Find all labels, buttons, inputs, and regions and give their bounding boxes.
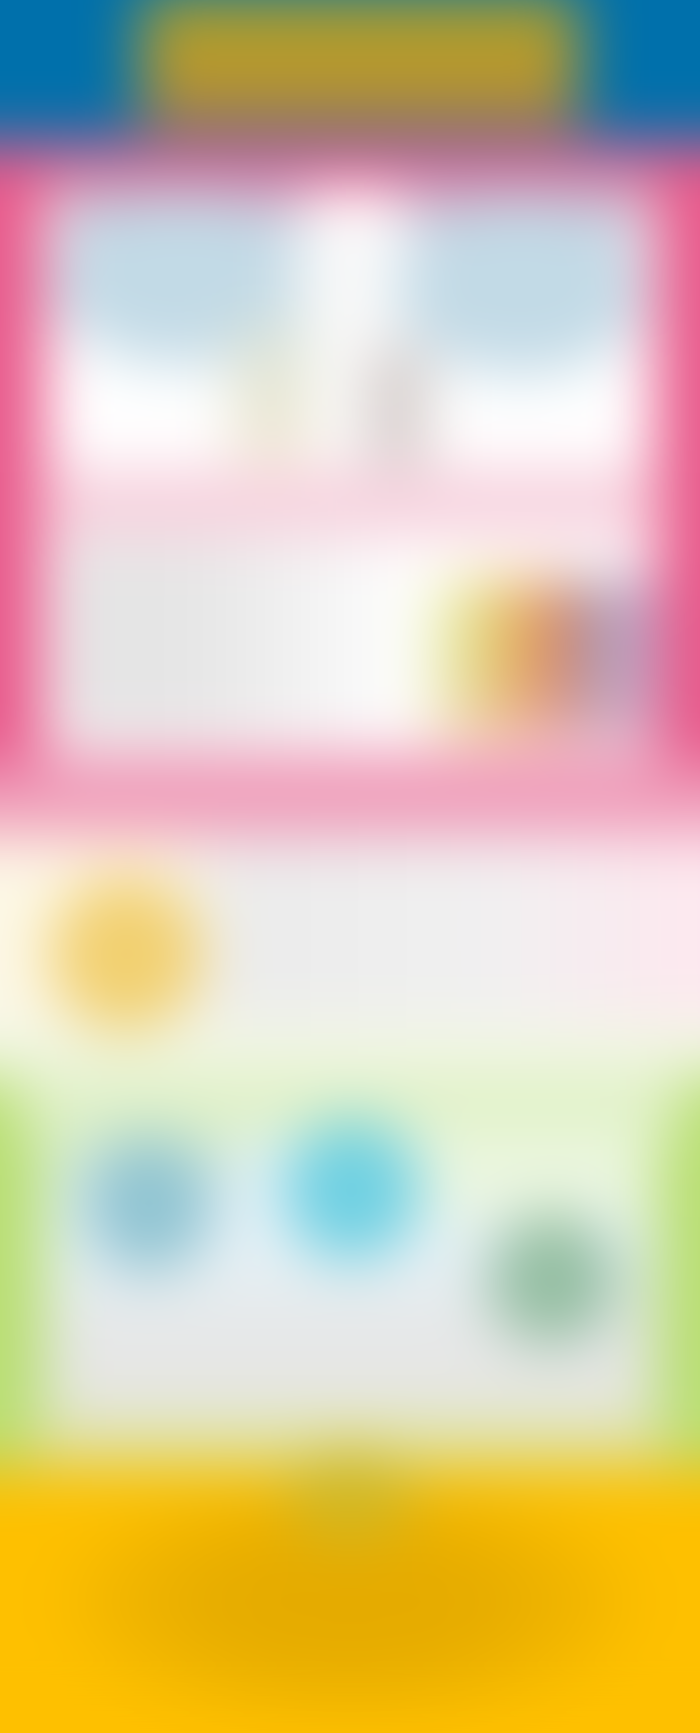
stripe: orange	[512, 580, 562, 740]
panel: upper white card	[44, 185, 656, 485]
band: pink footer of section	[0, 765, 700, 835]
icon: yellow sun circle	[50, 876, 202, 1032]
stripe: lavender	[598, 580, 653, 740]
icon: sage circle	[488, 1214, 616, 1344]
panel: lower white card	[44, 535, 656, 757]
lavender heading strip, upper card	[56, 180, 306, 224]
icon: blue circle	[84, 1136, 214, 1272]
illustration: left blue area	[50, 195, 315, 365]
illustration: centre light column	[296, 215, 382, 335]
panel: header band	[0, 0, 700, 142]
section fade into green	[0, 1020, 700, 1080]
lavender heading strip, upper card right	[400, 180, 650, 224]
stripe: yellow	[466, 580, 516, 740]
illustration: lower left tan figure	[232, 325, 312, 460]
stripe: mauve	[558, 580, 602, 740]
footer top centre tint	[285, 1450, 415, 1540]
chart: rainbow colour stack	[393, 534, 690, 780]
panel: green section background	[0, 1075, 700, 1470]
band: pale green strip	[20, 1070, 680, 1140]
panel: pink gap between cards	[40, 470, 660, 540]
panel: sun section background	[0, 835, 700, 1080]
panel: pink section background	[0, 142, 700, 832]
card corner: pale green upper left	[50, 1130, 240, 1170]
icon: cyan circle	[284, 1120, 420, 1260]
footer fade band	[30, 1420, 670, 1465]
footer centre darker zone	[40, 1470, 660, 1733]
card corner: pale green upper right	[420, 1130, 655, 1215]
panel: three column card	[44, 1135, 656, 1430]
illustration: lower centre grey figure	[362, 345, 430, 465]
text block: lower card grey text	[60, 540, 400, 738]
illustration: right blue area	[395, 200, 645, 375]
stripe: pale green	[428, 580, 470, 740]
title banner	[140, 0, 580, 126]
panel: yellow footer	[0, 1468, 700, 1733]
